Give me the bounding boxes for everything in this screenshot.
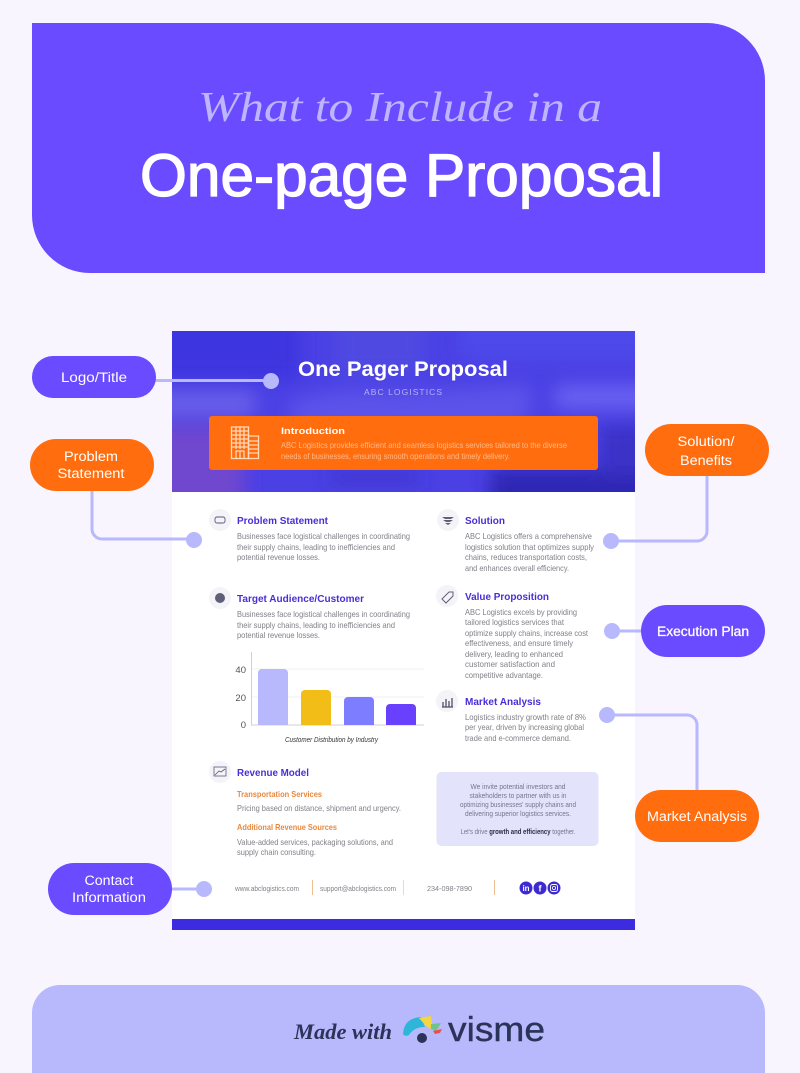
pill: contact information: Contact xyxy=(84,873,134,889)
pill: problem statement xyxy=(30,439,154,491)
pill: solution/benefits: Benefits xyxy=(680,453,732,469)
section: revenue model: Transportation Services xyxy=(237,790,322,799)
section: problem statement: potential revenue losses. xyxy=(237,553,320,562)
pill: contact information: Information xyxy=(72,890,146,906)
document title: One Pager Proposal xyxy=(298,358,508,381)
section: value proposition: Value Proposition xyxy=(465,591,549,603)
visme wordmark: visme xyxy=(448,1011,545,1049)
bar chart: customer distribution by industry: Customer Distribution by Industry xyxy=(285,735,379,744)
bar chart: customer distribution by industry xyxy=(235,652,424,744)
contact row: www.abclogistics.com xyxy=(234,884,299,893)
pill: logo/title xyxy=(32,356,156,398)
header banner xyxy=(32,23,765,273)
header script line: What to Include in a xyxy=(198,85,602,131)
section: market analysis: per year, driven by increasing global xyxy=(465,723,584,732)
section: target audience: Target Audience/Customer xyxy=(237,593,364,605)
section: market analysis: Market Analysis xyxy=(465,696,541,708)
section: target audience: Businesses face logistical challenges in coordinating xyxy=(237,610,410,619)
proposal document xyxy=(172,331,635,930)
pill: execution plan xyxy=(641,605,765,657)
section: solution xyxy=(437,509,595,573)
section: solution: and enhances overall efficiency. xyxy=(465,564,569,573)
icon: visme logo xyxy=(403,1016,442,1043)
section: revenue model: Revenue Model xyxy=(237,767,309,779)
section: market analysis xyxy=(436,690,586,743)
connector: solution xyxy=(603,470,707,549)
call to action box: delivering superior logistics services. xyxy=(465,809,571,818)
section: target audience: their supply chains, leading to inefficiencies and xyxy=(237,621,395,630)
section: solution: logistics solution that optimizes supply xyxy=(465,543,595,552)
footer band xyxy=(32,985,765,1073)
section: solution: chains, reduces transportation costs, xyxy=(465,553,587,562)
bar chart: customer distribution by industry: 20 xyxy=(235,693,246,704)
section: revenue model xyxy=(209,761,401,857)
connector: execution plan xyxy=(604,623,650,639)
icons: social media xyxy=(520,882,560,894)
introduction card xyxy=(209,416,598,470)
pill: problem statement: Problem xyxy=(64,449,118,465)
section: problem statement: Problem Statement xyxy=(237,515,328,527)
contact row: 234-098-7890 xyxy=(427,884,472,893)
pill: problem statement: Statement xyxy=(58,466,125,482)
pill: contact information xyxy=(48,863,172,915)
section: value proposition: customer satisfaction and xyxy=(465,660,555,669)
section: problem statement xyxy=(209,509,410,562)
section: solution: ABC Logistics offers a comprehensive xyxy=(465,532,592,541)
pill: execution plan: Execution Plan xyxy=(657,624,749,640)
contact row xyxy=(234,880,560,895)
section: market analysis: trade and e-commerce demand. xyxy=(465,734,571,743)
pill: market analysis xyxy=(635,790,759,842)
connector: logo/title xyxy=(150,373,279,389)
pill: market analysis: Market Analysis xyxy=(647,809,747,825)
section: revenue model: Value-added services, packaging solutions, and xyxy=(237,838,393,847)
pill: logo/title: Logo/Title xyxy=(61,370,127,386)
section: value proposition: optimize supply chains, increase cost xyxy=(465,629,589,638)
section: value proposition: ABC Logistics excels by providing xyxy=(465,608,577,617)
document hero xyxy=(172,331,635,492)
call to action box: Let's drive growth and efficiency together. xyxy=(460,827,576,836)
made with text: Made with xyxy=(293,1019,392,1044)
icons: social media: in xyxy=(522,884,530,893)
section: revenue model: supply chain consulting. xyxy=(237,848,316,857)
document bottom bar xyxy=(172,919,635,930)
section: revenue model: Pricing based on distance, shipment and urgency. xyxy=(237,804,401,813)
section: market analysis: Logistics industry growth rate of 8% xyxy=(465,713,586,722)
pill: solution/benefits xyxy=(645,424,769,476)
section: revenue model: Additional Revenue Sources xyxy=(237,823,337,832)
section: value proposition: delivery, leading to enhanced xyxy=(465,650,563,659)
icons: social media: f xyxy=(538,884,542,894)
call to action box xyxy=(436,772,598,846)
call to action box: We invite potential investors and xyxy=(470,782,566,791)
introduction text: Introduction xyxy=(281,426,345,437)
call to action box: stakeholders to partner with us in xyxy=(470,791,566,800)
connector: contact information xyxy=(165,881,212,897)
section: problem statement: their supply chains, leading to inefficiencies and xyxy=(237,543,395,552)
section: value proposition: tailored logistics services that xyxy=(465,618,565,627)
document subtitle: ABC LOGISTICS xyxy=(364,387,442,397)
icon: buildings xyxy=(232,427,258,458)
section: problem statement: Businesses face logistical challenges in coordinating xyxy=(237,532,410,541)
introduction text xyxy=(281,426,567,461)
section: value proposition: competitive advantage. xyxy=(465,671,543,680)
pill: solution/benefits: Solution/ xyxy=(678,434,735,450)
header title: One-page Proposal xyxy=(140,142,663,209)
section: solution: Solution xyxy=(465,515,505,527)
section: value proposition xyxy=(436,585,589,680)
connector: problem statement xyxy=(92,485,202,548)
bar chart: customer distribution by industry: 40 xyxy=(235,665,246,676)
introduction text: ABC Logistics provides efficient and seamless logistics services tailored to the diverse xyxy=(281,441,567,450)
contact row: support@abclogistics.com xyxy=(320,884,396,893)
connector: market analysis xyxy=(599,707,697,795)
introduction text: needs of businesses, ensuring smooth operations and timely delivery. xyxy=(281,452,510,461)
section: target audience: potential revenue losses. xyxy=(237,631,320,640)
bar chart: customer distribution by industry: 0 xyxy=(241,720,246,731)
section: value proposition: effectiveness, and ensure timely xyxy=(465,639,574,648)
section: target audience xyxy=(209,587,410,640)
call to action box: optimizing businesses' supply chains and xyxy=(460,800,576,809)
